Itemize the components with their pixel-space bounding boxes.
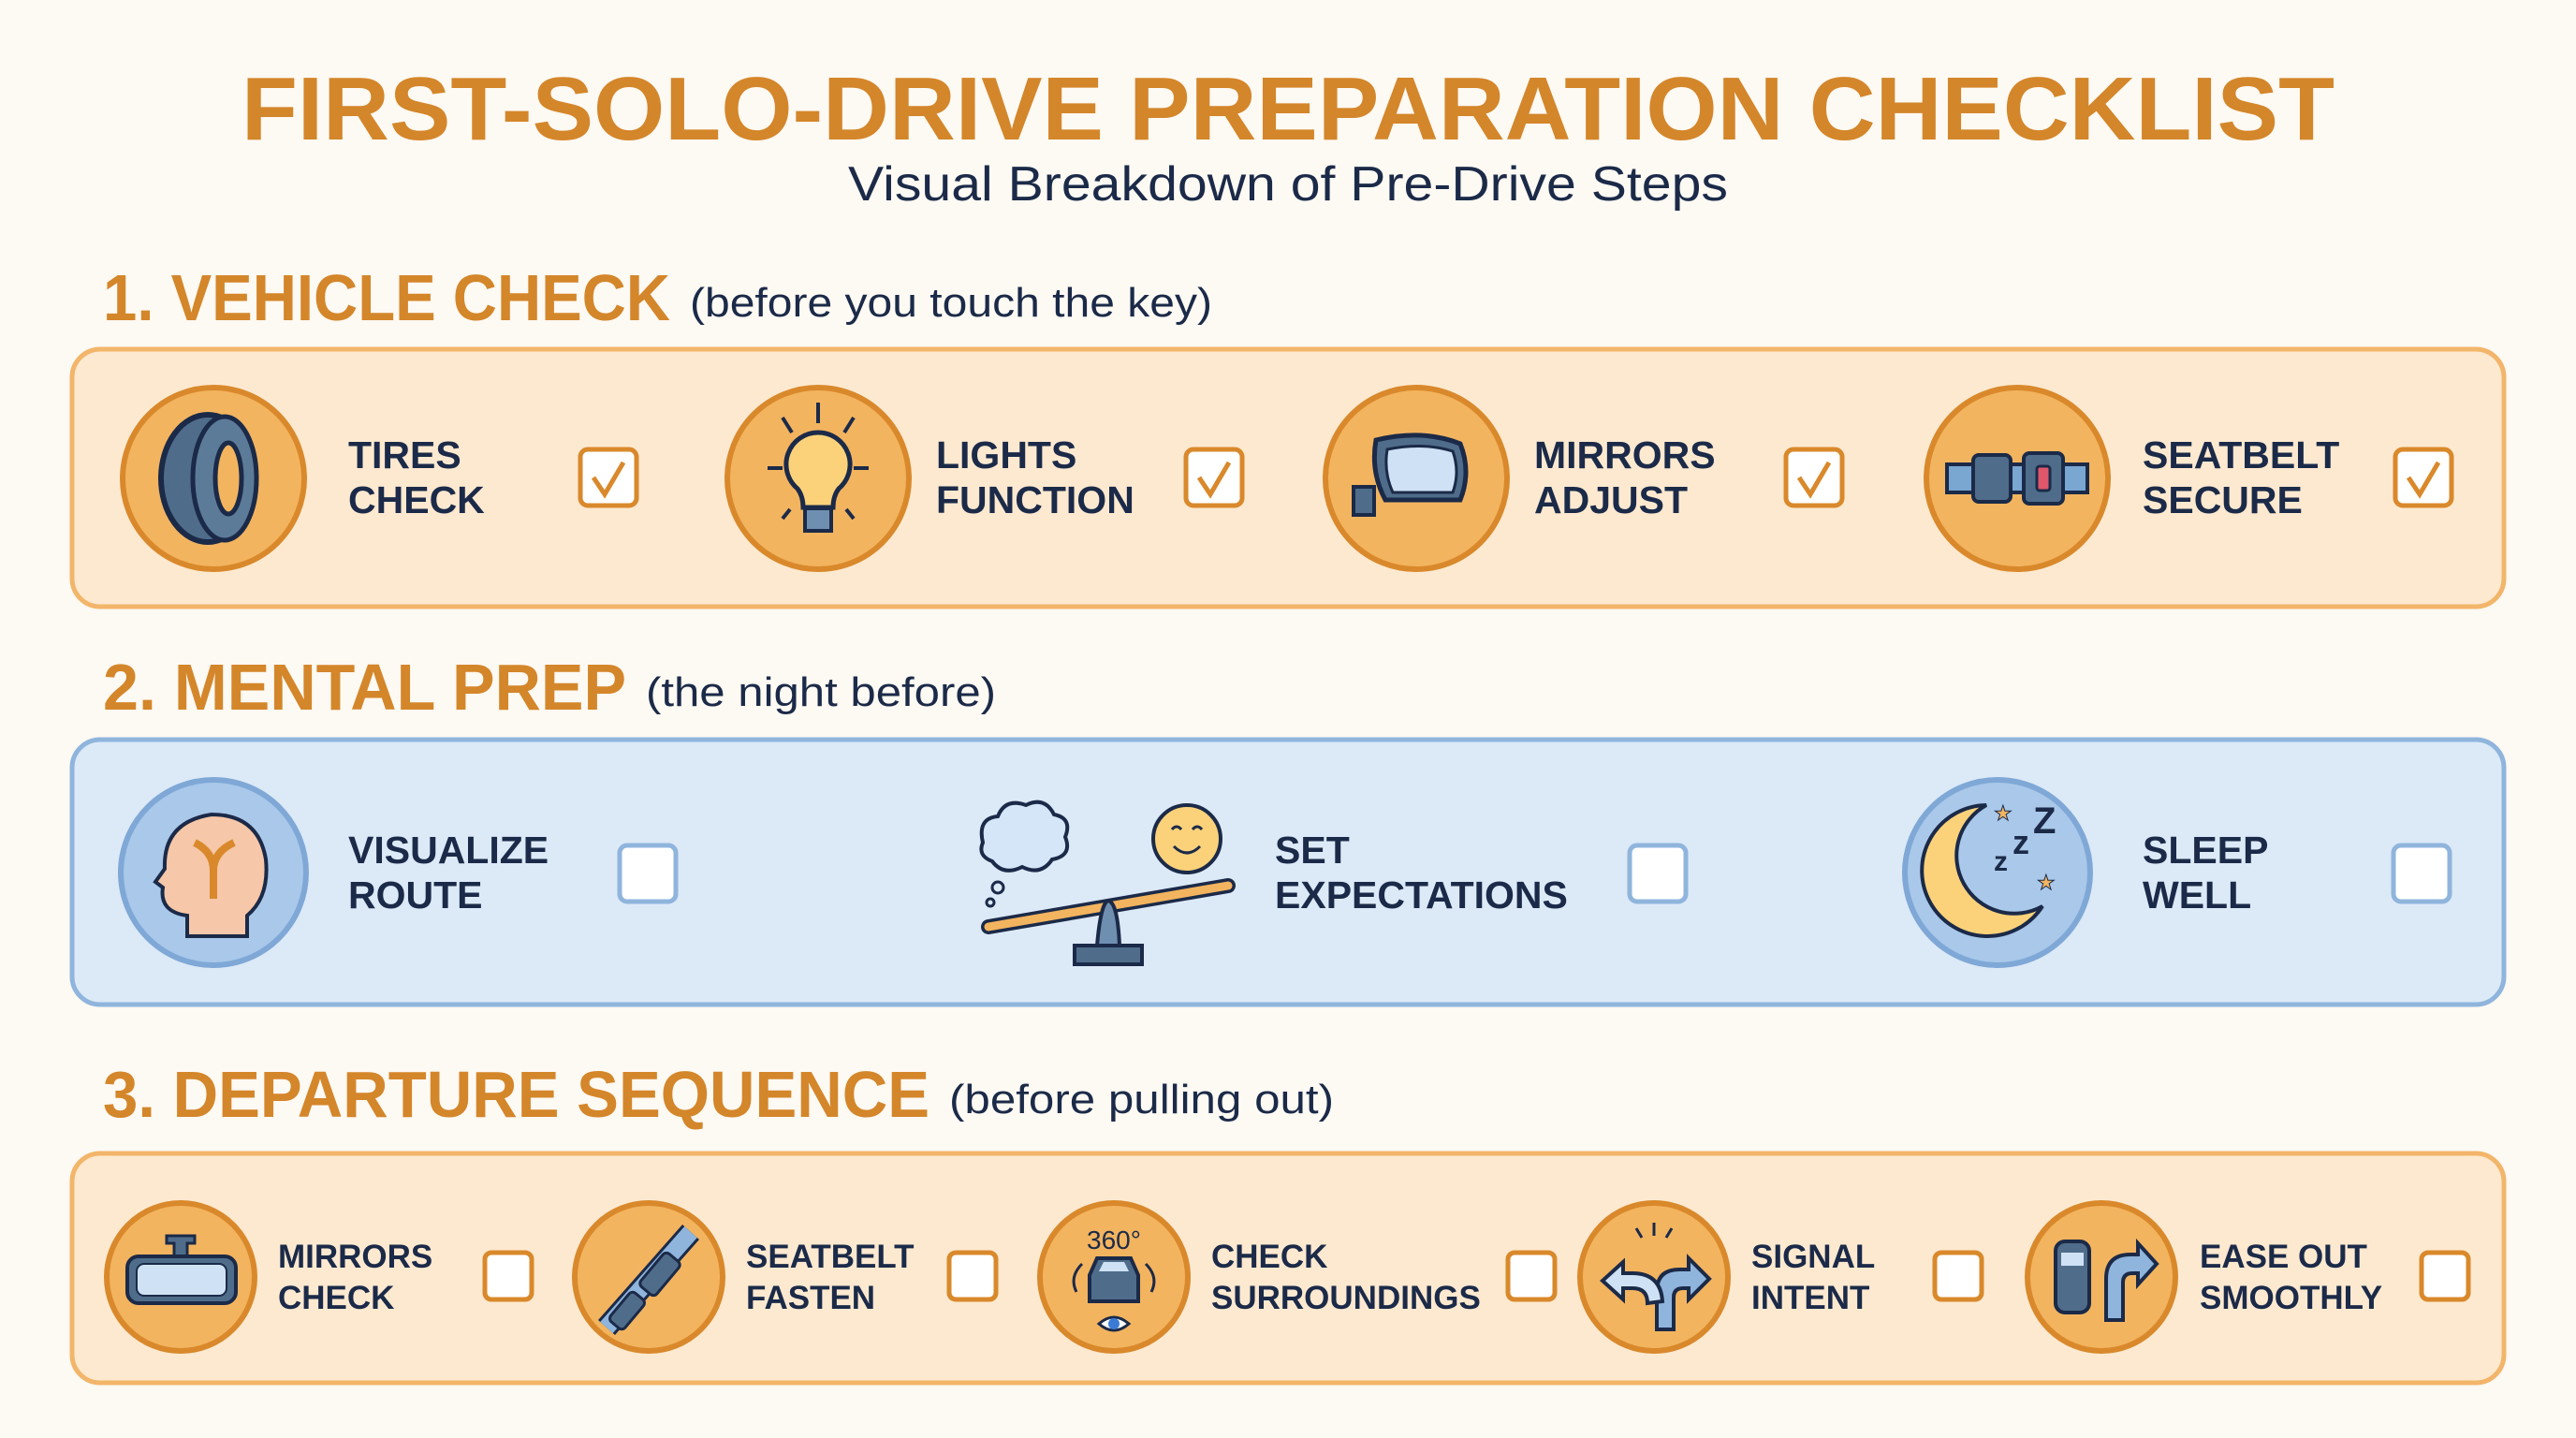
mirrors label: ADJUST — [1534, 478, 1688, 521]
icon: moon sleep: z — [1994, 846, 2008, 877]
checkbox: mirrors check — [485, 1253, 532, 1299]
ease out label: SMOOTHLY — [2200, 1280, 2382, 1316]
heading: mental prep — [103, 651, 996, 724]
checkbox: seatbelt fasten — [949, 1253, 996, 1299]
visualize label: VISUALIZE — [348, 829, 549, 872]
checkbox: mirrors — [1786, 449, 1842, 506]
icon: seesaw expectations — [981, 802, 1228, 964]
lights label: FUNCTION — [936, 478, 1134, 521]
tires label: CHECK — [348, 478, 485, 521]
checkbox: lights — [1186, 449, 1242, 506]
heading: departure sequence: 3. DEPARTURE SEQUENCE — [103, 1058, 929, 1131]
icon: moon sleep: ★ — [2037, 871, 2056, 894]
checkbox: sleep — [2393, 845, 2450, 902]
subtitle: Visual Breakdown of Pre-Drive Steps — [848, 157, 1728, 212]
seatbelt label: SEATBELT — [2143, 433, 2339, 477]
checkbox: ease out — [2422, 1253, 2468, 1299]
icon: bulb — [727, 388, 909, 569]
mirrors check label: CHECK — [278, 1280, 394, 1316]
mirrors label: MIRRORS — [1534, 433, 1716, 477]
heading: mental prep: 2. MENTAL PREP — [103, 651, 626, 724]
check surroundings label: SURROUNDINGS — [1211, 1280, 1481, 1316]
icon: tire — [123, 388, 304, 569]
check surroundings label: CHECK — [1211, 1239, 1327, 1275]
seatbelt fasten label: SEATBELT — [746, 1239, 915, 1275]
checkbox: surroundings — [1508, 1253, 1555, 1299]
icon: moon sleep: Z — [2033, 800, 2056, 842]
heading: departure sequence: (before pulling out) — [949, 1077, 1334, 1123]
heading: vehicle check — [103, 261, 1212, 334]
sleep label: WELL — [2143, 873, 2251, 917]
icon: seatbelt fasten — [575, 1203, 723, 1351]
checkbox: expectations — [1630, 845, 1686, 902]
icon: head with route — [121, 780, 306, 965]
icon: seatbelt buckle — [1926, 388, 2108, 569]
seatbelt label: SECURE — [2143, 478, 2303, 521]
icon: signal arrows — [1580, 1203, 1728, 1351]
visualize label: ROUTE — [348, 873, 483, 917]
icon: moon sleep — [1905, 780, 2090, 965]
icon: 360 car: 360° — [1087, 1225, 1141, 1255]
checkbox: seatbelt — [2395, 449, 2452, 506]
set expectations label: EXPECTATIONS — [1275, 873, 1568, 917]
heading: mental prep: (the night before) — [646, 669, 996, 715]
sleep label: SLEEP — [2143, 829, 2268, 872]
icon: moon sleep: ★ — [1994, 801, 2012, 825]
signal label: INTENT — [1751, 1280, 1869, 1316]
icon: moon sleep: z — [2012, 823, 2029, 861]
icon: side mirror — [1325, 388, 1507, 569]
panel: vehicle check — [72, 349, 2504, 607]
icon: ease out car — [2027, 1203, 2175, 1351]
lights label: LIGHTS — [936, 433, 1076, 477]
heading: vehicle check: (before you touch the key) — [690, 280, 1212, 326]
title: FIRST-SOLO-DRIVE PREPARATION CHECKLIST — [242, 59, 2334, 159]
signal label: SIGNAL — [1751, 1239, 1875, 1275]
panel: mental prep — [72, 740, 2504, 1005]
checkbox: tires — [580, 449, 637, 506]
panel: departure sequence — [72, 1153, 2504, 1383]
icon: 360 car — [1040, 1203, 1188, 1351]
heading: vehicle check: 1. VEHICLE CHECK — [103, 261, 670, 334]
set expectations label: SET — [1275, 829, 1350, 872]
mirrors check label: MIRRORS — [278, 1239, 432, 1275]
checkbox: visualize — [620, 845, 676, 902]
ease out label: EASE OUT — [2200, 1239, 2367, 1275]
icon: rearview mirror — [107, 1203, 255, 1351]
checkbox: signal — [1935, 1253, 1982, 1299]
seatbelt fasten label: FASTEN — [746, 1280, 875, 1316]
tires label: TIRES — [348, 433, 461, 477]
